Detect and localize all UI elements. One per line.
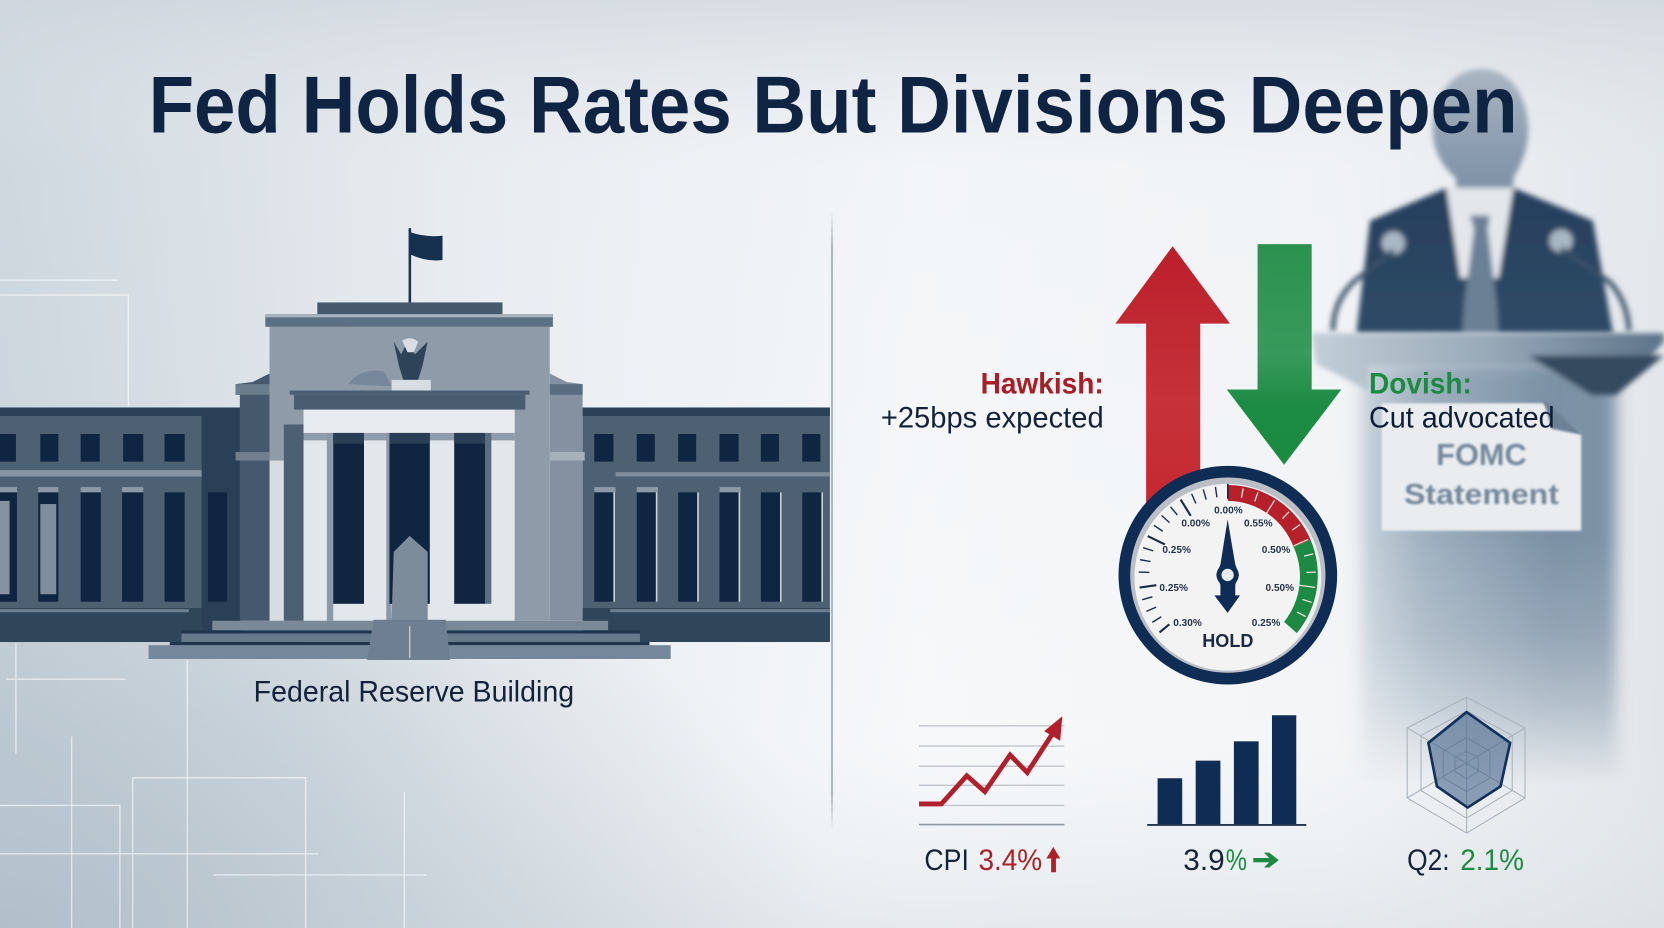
hawkish label	[881, 368, 1104, 435]
gauge scale labels: 0.25%	[1162, 545, 1191, 556]
CPI line chart	[919, 716, 1064, 825]
podium top	[1312, 333, 1664, 395]
Federal Reserve building	[0, 228, 830, 660]
central block	[236, 302, 585, 621]
arrow: hawkish up	[1115, 246, 1230, 509]
gauge scale labels: 0.50%	[1262, 545, 1290, 556]
dovish label: Cut advocated	[1369, 402, 1555, 435]
gauge needle	[1214, 519, 1240, 613]
speaker at podium	[1312, 69, 1664, 796]
GDP label	[1407, 844, 1524, 877]
right wing	[583, 407, 830, 642]
gauge scale labels: 0.25%	[1252, 618, 1280, 629]
hawkish label: Hawkish:	[981, 368, 1104, 401]
statement paper: FOMC	[1436, 437, 1527, 472]
dovish label: Dovish:	[1369, 368, 1472, 401]
gauge hold label: HOLD	[1202, 631, 1253, 651]
gauge scale labels: 0.50%	[1266, 583, 1294, 594]
background grid lines	[0, 280, 427, 928]
podium body	[1362, 361, 1616, 796]
gauge scale labels: 0.55%	[1244, 518, 1273, 529]
radar data shape	[1428, 712, 1510, 808]
gauge dial	[1119, 466, 1337, 684]
CPI label: 3.4%	[978, 844, 1042, 877]
building caption: Federal Reserve Building	[254, 675, 574, 708]
radar grid	[1407, 697, 1525, 833]
gauge green zone	[1284, 540, 1318, 633]
eagle statue	[348, 338, 431, 391]
speaker figure	[1333, 69, 1629, 333]
flag	[409, 228, 443, 303]
portico	[290, 391, 530, 621]
unemployment label: 3.9	[1183, 844, 1225, 877]
dovish label	[1369, 368, 1555, 435]
gauge zone ticks	[1241, 488, 1316, 617]
GDP radar chart	[1407, 697, 1525, 833]
title: Fed Holds Rates But Divisions Deepen	[149, 61, 1518, 151]
left wing	[0, 407, 241, 642]
unemployment label	[1183, 844, 1279, 877]
unemployment bar chart	[1147, 715, 1306, 826]
central door statue	[392, 536, 428, 621]
CPI label	[924, 844, 1060, 877]
unemployment label: %	[1226, 844, 1247, 877]
hawkish label: +25bps expected	[881, 402, 1104, 435]
statement paper	[1382, 399, 1583, 531]
gauge scale labels: 0.00%	[1214, 506, 1243, 517]
gauge scale labels: 0.30%	[1173, 618, 1202, 629]
arrow: dovish down	[1227, 244, 1341, 465]
gauge scale labels: 0.25%	[1159, 583, 1188, 594]
gauge red zone	[1228, 485, 1311, 547]
gauge	[1119, 466, 1337, 684]
CPI label: CPI	[924, 844, 969, 877]
gauge scale labels: 0.00%	[1181, 518, 1210, 529]
central divider	[831, 210, 833, 831]
GDP label: 2.1%	[1460, 844, 1524, 877]
gauge scale labels	[1159, 506, 1294, 629]
statement paper: Statement	[1404, 479, 1559, 511]
GDP label: Q2:	[1407, 844, 1450, 877]
gauge ticks	[1139, 484, 1228, 632]
entrance steps	[149, 620, 671, 660]
